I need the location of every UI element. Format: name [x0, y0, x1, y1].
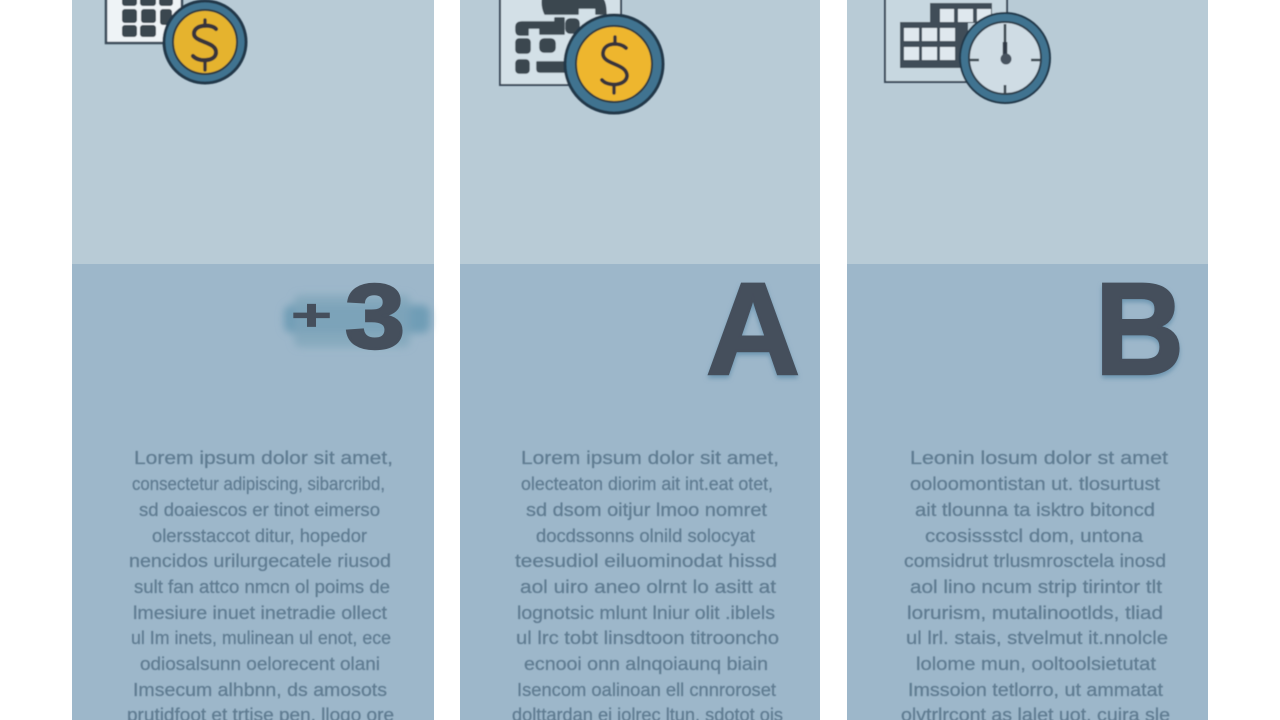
body text: right column: aol lino ncum strip tirintor tlt	[910, 576, 1162, 597]
body text: left column: lmesiure inuet inetradie ollect	[133, 602, 387, 623]
left column upper band	[72, 0, 434, 264]
icon: large calendar with dollar coin	[500, 0, 663, 113]
panel: right column	[847, 0, 1208, 720]
middle column upper band	[460, 0, 820, 264]
icon: calendar with clock	[885, 0, 1050, 103]
body text: right column: comsidrut trlusmrosctela inosd	[904, 550, 1166, 571]
body text: middle column: teesudiol eiluominodat hissd	[515, 550, 777, 571]
body text: left column	[127, 447, 394, 720]
body text: middle column: ul lrc tobt linsdtoon titrooncho	[516, 627, 779, 648]
score label +3: +	[291, 291, 332, 340]
right column lower band	[847, 264, 1208, 720]
grade letter A: A	[706, 255, 800, 402]
middle column lower band	[460, 264, 820, 720]
body text: middle column	[512, 447, 783, 720]
body text: right column: Leonin losum dolor st amet	[910, 447, 1168, 468]
body text: left column: Imsecum alhbnn, ds amosots	[133, 679, 387, 700]
right column upper band	[847, 0, 1208, 264]
body text: right column: lolome mun, ooltoolsietutat	[916, 653, 1156, 674]
pill highlight behind +3	[284, 295, 430, 347]
body text: left column: olersstaccot ditur, hopedor	[152, 525, 367, 546]
body text: right column: lorurism, mutalinootlds, tliad	[907, 602, 1163, 623]
body text: left column: odiosalsunn oelorecent olani	[140, 653, 380, 674]
body text: middle column: olecteaton diorim ait int.eat otet,	[521, 473, 773, 494]
body text: middle column: sd dsom oitjur lmoo nomret	[526, 499, 767, 520]
body text: left column: Lorem ipsum dolor sit amet,	[134, 447, 393, 468]
body text: left column: consectetur adipiscing, sibarcribd,	[132, 473, 385, 494]
left column lower band	[72, 264, 434, 720]
body text: right column: ooloomontistan ut. tlosurtust	[910, 473, 1160, 494]
body text: right column: ccosissstcl dom, untona	[925, 525, 1144, 546]
body text: right column: ait tlounna ta isktro bitoncd	[915, 499, 1155, 520]
body text: right column: Imssoion tetlorro, ut ammatat	[908, 679, 1163, 700]
body text: middle column: aol uiro aneo olrnt lo asitt at	[520, 576, 776, 597]
body text: right column: ul lrl. stais, stvelmut it.nnolcle	[906, 627, 1168, 648]
body text: middle column: Isencom oalinoan ell cnnroroset	[517, 679, 776, 700]
body text: middle column: Lorem ipsum dolor sit amet,	[521, 447, 779, 468]
body text: left column: ul Im inets, mulinean ul enot, ece	[131, 627, 391, 648]
panel: left column	[72, 0, 434, 720]
panel: middle column	[460, 0, 820, 720]
body text: middle column: docdssonns olnild solocyat	[536, 525, 755, 546]
body text: left column: sult fan attco nmcn ol poims de	[134, 576, 390, 597]
score label +3: 3	[345, 266, 405, 368]
body text: middle column: lognotsic mlunt lniur olit .iblels	[517, 602, 775, 623]
body text: left column: nencidos urilurgecatele riusod	[129, 550, 391, 571]
body text: middle column: ecnooi onn alnqoiaunq biain	[524, 653, 768, 674]
body text: left column: sd doaiescos er tinot eimerso	[139, 499, 380, 520]
grade letter B: B	[1095, 255, 1184, 402]
body text: right column	[901, 447, 1170, 720]
score label +3	[291, 266, 405, 368]
icon: calendar with dollar coin	[106, 0, 246, 83]
